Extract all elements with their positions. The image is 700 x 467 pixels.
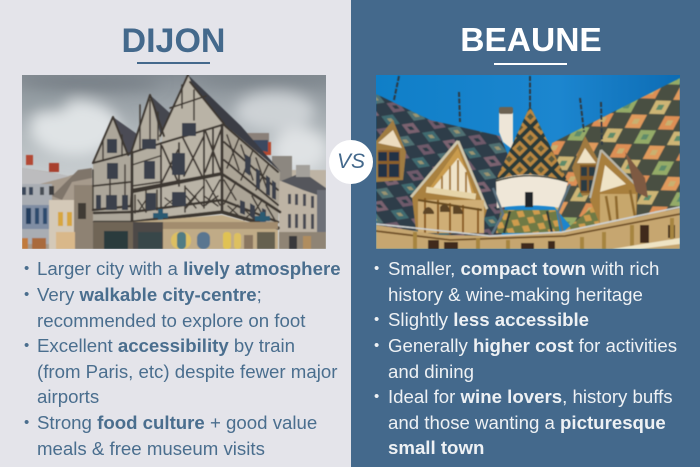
bullet 1: Smaller, compact town with rich <box>388 258 659 279</box>
bullet 3: • <box>374 337 379 354</box>
right lower roof <box>563 205 610 232</box>
bullet list: Beaune <box>374 258 677 458</box>
bullet 4: and those wanting a picturesque <box>388 412 666 433</box>
bullet 2: Slightly less accessible <box>388 309 589 330</box>
photo: Hospices de Beaune tiled roofs <box>376 75 680 249</box>
VS badge: VS <box>337 150 365 173</box>
bullet 4 <box>374 386 673 458</box>
bullet 4: Ideal for wine lovers, history buffs <box>388 386 673 407</box>
bullet 3: Excellent accessibility by train <box>37 335 295 356</box>
bullet 3: and dining <box>388 361 474 382</box>
bullet 3: (from Paris, etc) despite fewer major <box>37 361 337 382</box>
right big roof <box>540 78 680 249</box>
turret lower roof <box>496 210 560 233</box>
bullet 4: • <box>374 388 379 405</box>
bullet 4 <box>24 412 317 459</box>
panel: Beaune <box>351 0 700 467</box>
bullet 3: airports <box>37 386 99 407</box>
gable 2 <box>150 95 172 135</box>
bullet 1: • <box>374 260 379 277</box>
heading: Dijon: DIJON <box>122 22 225 60</box>
heading: Beaune: BEAUNE <box>460 22 602 59</box>
bullet 2: • <box>24 286 29 303</box>
bullet 4: Strong food culture + good value <box>37 412 317 433</box>
bullet 1 <box>374 258 659 305</box>
gable 1 <box>113 117 137 158</box>
heading underline <box>137 62 210 64</box>
bullet 4: • <box>24 414 29 431</box>
heading underline <box>494 63 567 65</box>
central turret <box>496 106 568 182</box>
blue-grey valley flashing <box>492 184 570 234</box>
right wing <box>222 124 280 228</box>
panel: Dijon <box>0 0 351 467</box>
chimney <box>499 112 513 150</box>
gable 3 & main <box>160 75 224 220</box>
bullet 2: Very walkable city-centre; <box>37 284 262 305</box>
main timber lines <box>93 75 280 228</box>
photo: half-timbered houses in Dijon <box>22 75 326 249</box>
bullet 3 <box>24 335 338 407</box>
bullet 2: • <box>374 311 379 328</box>
ground floor <box>93 215 278 249</box>
bullet 3 <box>374 335 677 382</box>
bullet 1: Larger city with a lively atmosphere <box>37 258 341 279</box>
bullet 2 <box>24 284 306 331</box>
right houses <box>279 170 326 249</box>
left big roof <box>376 94 510 249</box>
bullet 4: small town <box>388 437 484 458</box>
right big dormer <box>590 150 638 232</box>
right dormer small <box>572 136 598 196</box>
bullet 2: recommended to explore on foot <box>37 310 305 331</box>
bullet 3: Generally higher cost for activities <box>388 335 677 356</box>
finials <box>394 76 602 145</box>
bottom gallery <box>376 208 680 249</box>
windows <box>96 123 276 222</box>
big left dormer <box>412 141 487 232</box>
bullet list: Dijon <box>24 258 341 459</box>
VS badge <box>329 140 373 184</box>
left houses <box>22 168 93 249</box>
back chimney <box>245 133 269 153</box>
green cross signs <box>153 209 168 222</box>
bullet 1: history & wine-making heritage <box>388 284 643 305</box>
bullet 1: • <box>24 260 29 277</box>
bullet 3: • <box>24 337 29 354</box>
small left dormer <box>376 120 406 182</box>
bullet 4: meals & free museum visits <box>37 438 265 459</box>
